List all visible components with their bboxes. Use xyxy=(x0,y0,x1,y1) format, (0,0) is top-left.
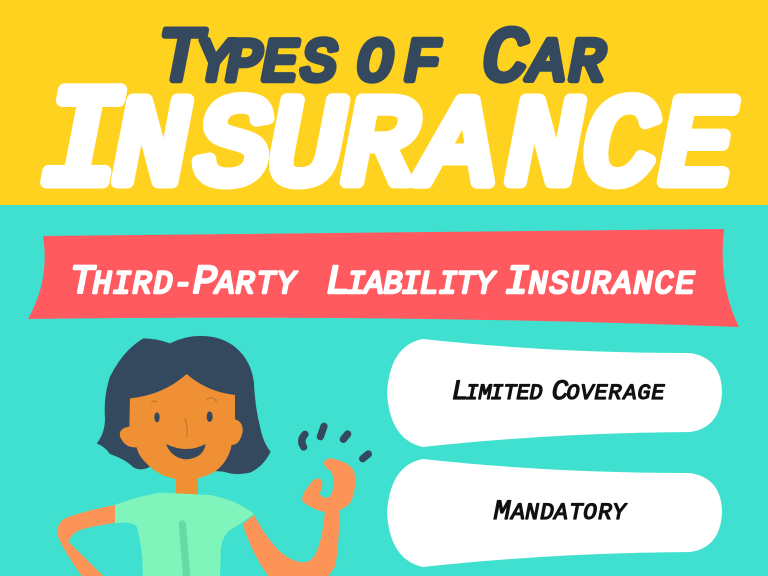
shirt xyxy=(115,493,254,576)
motion marks xyxy=(302,426,368,459)
neck xyxy=(176,473,198,496)
card: limited coverage xyxy=(387,339,722,447)
card: mandatory xyxy=(387,459,722,567)
left arm xyxy=(57,505,116,576)
title: insurance: INSURANCE xyxy=(40,66,735,225)
eyes xyxy=(154,411,213,422)
hand xyxy=(302,458,355,513)
banner text: THIRD-PARTY LIABILITY INSURANCE xyxy=(70,260,695,306)
card text: LIMITED COVERAGE xyxy=(452,377,665,408)
brows and nose xyxy=(152,398,217,437)
header band xyxy=(0,0,768,205)
shirt seam xyxy=(182,524,187,576)
title: types of car: TYPES OF CAR xyxy=(157,17,605,103)
banner xyxy=(28,229,739,327)
smile xyxy=(166,444,206,459)
face xyxy=(120,374,243,480)
banner shape xyxy=(28,229,739,327)
right arm xyxy=(243,510,339,576)
card shape xyxy=(387,459,722,567)
character: woman xyxy=(57,336,368,576)
hair xyxy=(97,336,271,474)
card text: MANDATORY xyxy=(494,497,628,528)
card shape xyxy=(387,339,722,447)
